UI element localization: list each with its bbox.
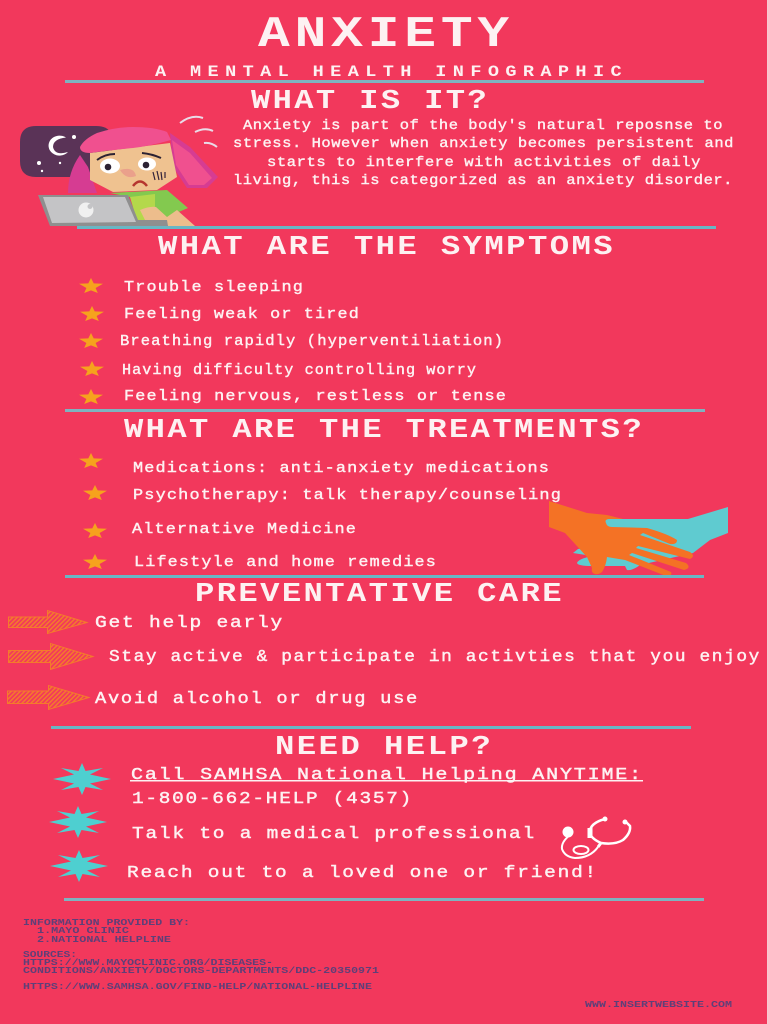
footer: sources — [23, 917, 379, 992]
list: symptoms: Having difficulty controlling worry — [122, 363, 477, 379]
list: treatments: Medications: anti-anxiety medications — [133, 461, 550, 477]
footer: sources: SOURCES: — [23, 949, 77, 960]
text block: definition: living, this is categorized as an anxiety disorder. — [233, 173, 733, 189]
list: need help: Talk to a medical professional — [132, 824, 536, 843]
footer: sources: CONDITIONS/ANXIETY/DOCTORS-DEPARTMENTS/DDC-20350971 — [23, 965, 379, 976]
list: preventative care — [8, 610, 761, 710]
heading: symptoms: WHAT ARE THE SYMPTOMS — [158, 233, 615, 263]
footer: website: WWW.INSERTWEBSITE.COM — [585, 999, 732, 1010]
arm — [140, 207, 195, 226]
list: preventative care: Stay active & participate in activties that you enjoy — [109, 647, 761, 666]
heading: what is it: WHAT IS IT? — [251, 87, 489, 117]
sweat marks — [180, 117, 217, 147]
footer: sources: 2.NATIONAL HELPLINE — [37, 934, 171, 945]
text block: definition: Anxiety is part of the body's natural reposnse to — [243, 118, 723, 134]
list: treatments — [79, 453, 562, 571]
laptop — [38, 195, 168, 226]
icon: night window — [20, 126, 112, 177]
arrow 1 — [8, 610, 87, 634]
text block: definition: starts to interfere with activities of daily — [267, 155, 701, 171]
footer: sources: HTTPS://WWW.SAMHSA.GOV/FIND-HELP/NATIONAL-HELPLINE — [23, 981, 372, 992]
list: symptoms — [79, 278, 507, 405]
hair: right side — [170, 133, 218, 188]
hair: back left — [68, 155, 97, 193]
list: symptoms: Feeling nervous, restless or tense — [124, 389, 507, 405]
face — [90, 143, 177, 192]
heading: treatments: WHAT ARE THE TREATMENTS? — [124, 416, 644, 446]
heading: preventative care: PREVENTATIVE CARE — [195, 580, 564, 610]
text block: definition — [233, 118, 734, 189]
list: need help — [49, 763, 643, 882]
footer: sources: 1.MAYO CLINIC — [37, 925, 129, 936]
arrow 2 — [8, 644, 93, 670]
list: symptoms: Feeling weak or tired — [124, 307, 360, 323]
list: preventative care: Get help early — [95, 613, 284, 632]
icon: handshake — [549, 501, 728, 576]
eyes — [97, 153, 161, 174]
subtitle: A MENTAL HEALTH INFOGRAPHIC — [155, 63, 628, 81]
hair fringe — [80, 127, 171, 153]
icon: anxious girl with laptop — [20, 117, 218, 226]
list: need help: Reach out to a loved one or friend! — [127, 863, 598, 882]
list: symptoms: Breathing rapidly (hyperventiliation) — [120, 334, 504, 350]
text block: definition: stress. However when anxiety becomes persistent and — [233, 136, 734, 152]
list: treatments: Alternative Medicine — [132, 522, 357, 538]
nose and mouth — [120, 169, 136, 177]
heading: need help: NEED HELP? — [275, 733, 493, 763]
list: preventative care: Avoid alcohol or drug use — [95, 689, 419, 708]
footer: sources: INFORMATION PROVIDED BY: — [23, 917, 190, 928]
list: treatments: Psychotherapy: talk therapy/counseling — [133, 488, 562, 504]
footer: sources: HTTPS://WWW.MAYOCLINIC.ORG/DISEASES- — [23, 957, 273, 968]
title: ANXIETY — [258, 10, 514, 60]
list: treatments: Lifestyle and home remedies — [134, 555, 437, 571]
icon: stethoscope — [562, 816, 630, 858]
list: need help: Call SAMHSA National Helping ANYTIME: — [131, 765, 643, 784]
arrow 3 — [8, 686, 89, 710]
list: symptoms: Trouble sleeping — [124, 280, 304, 296]
shirt — [110, 190, 188, 221]
list: need help: 1-800-662-HELP (4357) — [132, 789, 413, 808]
